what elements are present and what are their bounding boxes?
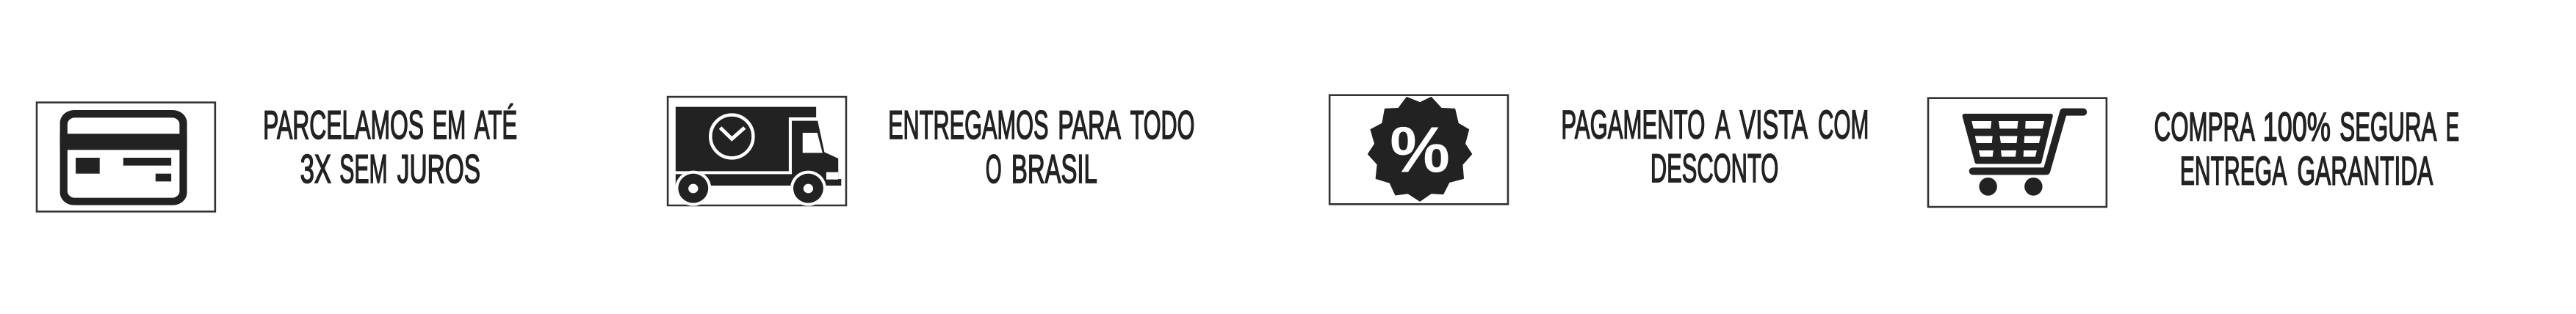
panel: pagamento bbox=[1330, 95, 1869, 204]
text: parcelamos em até 3x sem juros: PARCELAMOS bbox=[263, 102, 424, 147]
text: compra 100% segura e entrega garantida bbox=[2154, 104, 2459, 193]
text: compra 100% segura e entrega garantida: COMPRA bbox=[2154, 104, 2255, 149]
text: COM bbox=[1818, 102, 1869, 147]
text: pagamento a vista com desconto: VISTA bbox=[1739, 102, 1808, 147]
text: pagamento a vista com desconto: A bbox=[1715, 102, 1731, 147]
icon frame: truck bbox=[668, 97, 846, 205]
text: entregamos para todo o brasil: BRASIL bbox=[1011, 146, 1097, 191]
icon: credit card bbox=[60, 110, 187, 205]
text: entregamos para todo o brasil bbox=[888, 102, 1194, 191]
text: compra 100% segura e entrega garantida: 100% bbox=[2263, 104, 2331, 149]
panel: parcelamento bbox=[37, 102, 517, 211]
panel: compra segura bbox=[1928, 98, 2459, 207]
icon frame: cart bbox=[1928, 98, 2107, 207]
text: ATÉ bbox=[475, 102, 517, 147]
text: parcelamos em até 3x sem juros: 3X bbox=[300, 146, 331, 191]
panel: entrega bbox=[668, 97, 1194, 206]
icon: delivery truck with clock bbox=[675, 107, 841, 206]
text: entregamos para todo o brasil: O bbox=[986, 146, 1002, 191]
icon: shopping cart bbox=[1964, 112, 2083, 196]
icon: percent badge: % bbox=[1390, 114, 1450, 186]
text: parcelamos em até 3x sem juros bbox=[263, 102, 517, 191]
text: E bbox=[2446, 104, 2459, 149]
text: pagamento a vista com desconto: PAGAMENTO bbox=[1561, 102, 1705, 147]
text: pagamento a vista com desconto bbox=[1561, 102, 1869, 191]
icon frame: credit card bbox=[37, 103, 215, 211]
icon: percent badge bbox=[1368, 98, 1471, 201]
text: pagamento a vista com desconto: DESCONTO bbox=[1650, 145, 1778, 191]
text: entregamos para todo o brasil: PARA bbox=[1058, 102, 1121, 147]
text: entregamos para todo o brasil: ENTREGAMOS bbox=[888, 102, 1048, 147]
text: parcelamos em até 3x sem juros: SEM bbox=[339, 146, 388, 191]
text: parcelamos em até 3x sem juros: JUROS bbox=[397, 146, 480, 191]
text: TODO bbox=[1130, 102, 1194, 147]
text: compra 100% segura e entrega garantida: ENTREGA bbox=[2180, 148, 2287, 193]
text: parcelamos em até 3x sem juros: EM bbox=[433, 102, 466, 147]
icon frame: discount bbox=[1330, 95, 1508, 204]
